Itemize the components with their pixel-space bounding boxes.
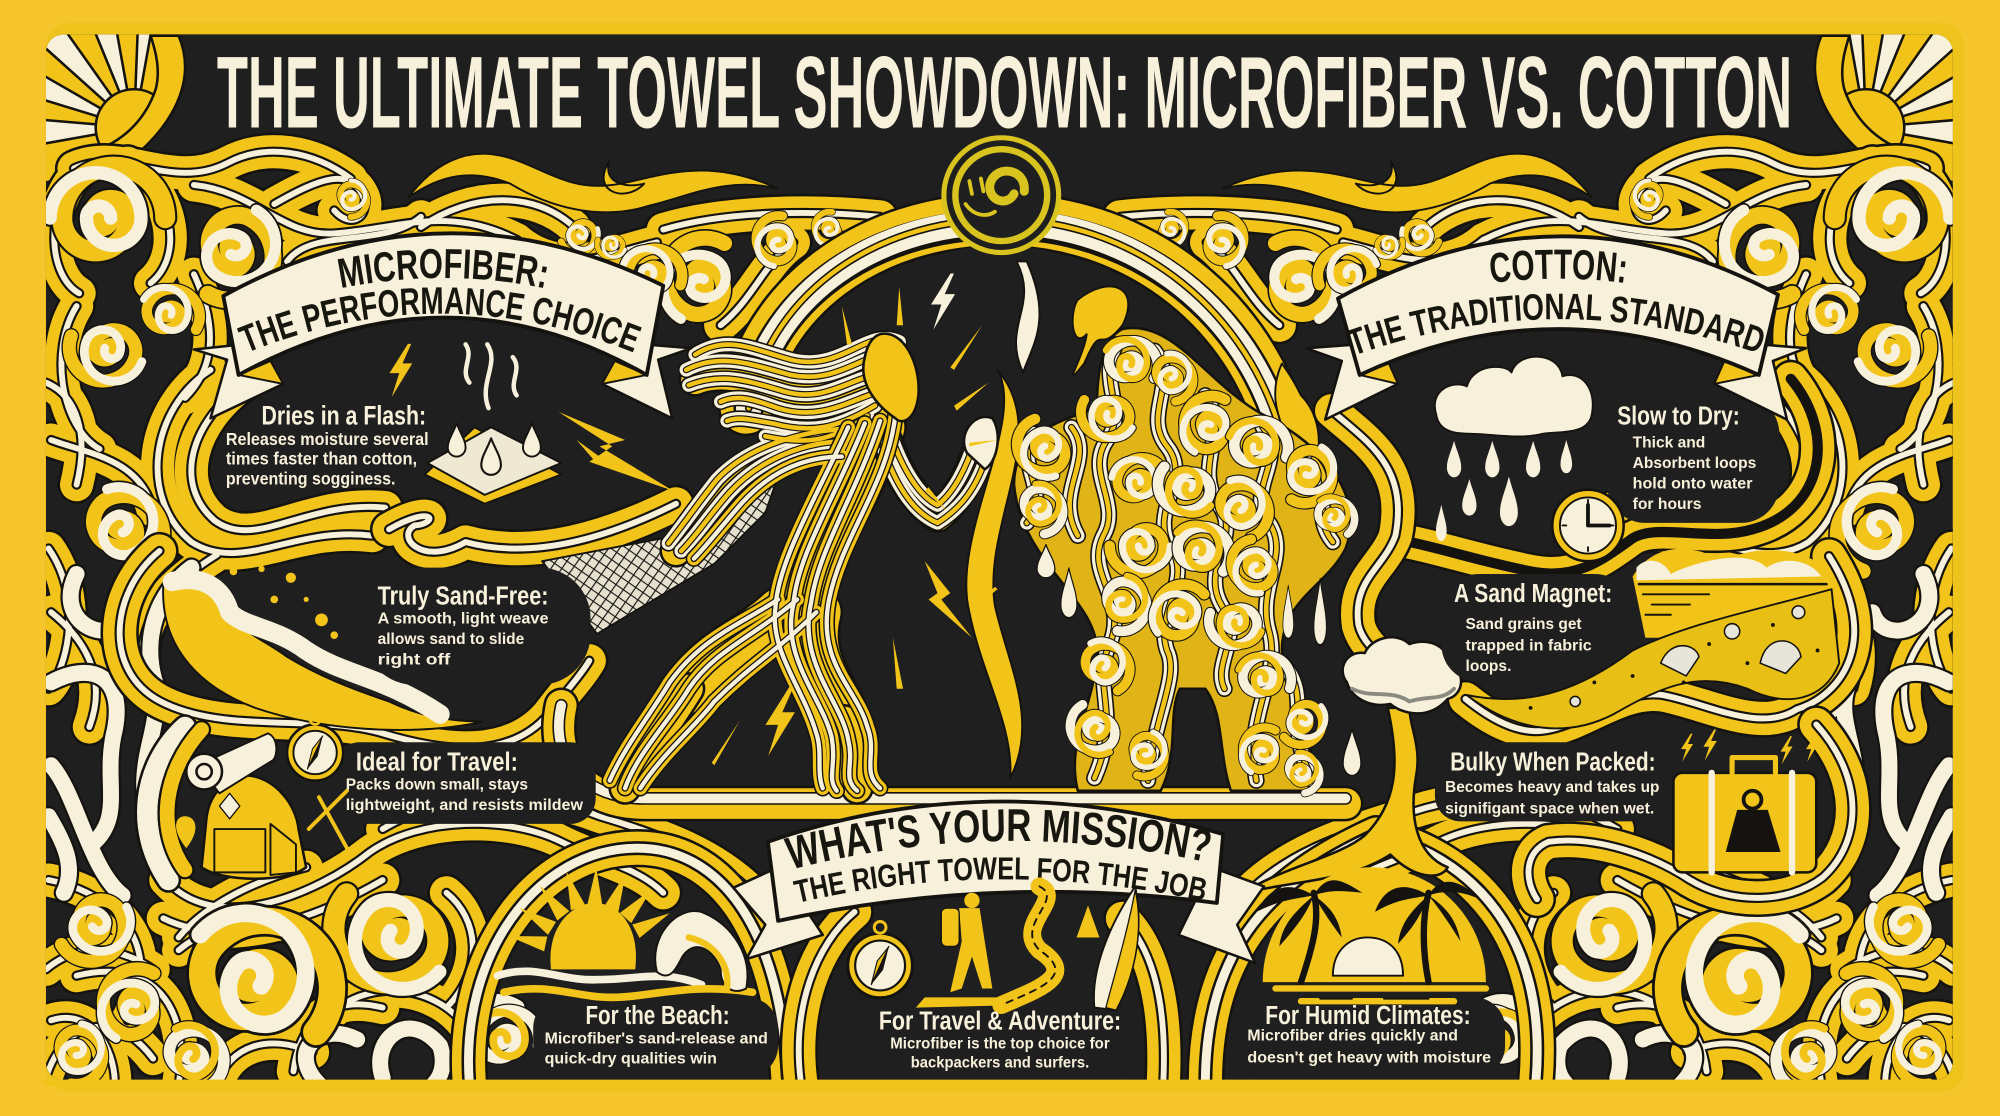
icon: backpack, roll, compass, pin xyxy=(176,714,347,879)
text block: a sand magnet: Sand grains get xyxy=(1466,616,1582,633)
banner heading: COTTON: xyxy=(1490,250,1626,283)
text block: a sand magnet xyxy=(1454,580,1612,675)
runner hair and arm strands xyxy=(668,339,987,551)
banner heading: WHAT'S YOUR MISSION? xyxy=(784,809,1211,868)
monster wavy fibres xyxy=(1027,344,1333,781)
icon: sunset with wave xyxy=(497,867,753,997)
banner: cotton xyxy=(1305,234,1808,421)
icon: suitcase with weight xyxy=(1673,730,1818,872)
icon: rain cloud xyxy=(1435,357,1593,541)
fist xyxy=(964,417,998,469)
head xyxy=(863,334,919,421)
text block: slow to dry: Thick and xyxy=(1633,435,1705,452)
text block: dries in a flash: times faster than cotton, xyxy=(226,448,417,468)
cream curls xyxy=(49,568,517,1084)
text block: truly sand-free xyxy=(378,583,549,668)
text block: bulky when packed: Bulky When Packed: xyxy=(1450,748,1656,776)
text block: truly sand-free: allows sand to slide xyxy=(378,631,524,648)
icon: pine tree xyxy=(1077,906,1099,937)
banner subheading: THE TRADITIONAL STANDARD xyxy=(1349,294,1764,354)
banner subheading: THE RIGHT TOWEL FOR THE JOB xyxy=(792,857,1206,902)
banner: mission xyxy=(732,800,1266,964)
text block: ideal for travel: Ideal for Travel: xyxy=(356,748,518,776)
icon: clock xyxy=(1552,490,1624,561)
banner tails xyxy=(194,344,691,418)
text block: for humid climates: Microfiber dries quickly and xyxy=(1247,1028,1458,1045)
text block: truly sand-free: right off xyxy=(378,651,451,668)
icon: winding road xyxy=(1001,886,1055,1005)
text block: dries in a flash xyxy=(226,401,429,489)
text block: bulky when packed: Becomes heavy and takes up xyxy=(1445,779,1660,796)
text block: for travel and adventure: Microfiber is the top choice for xyxy=(890,1035,1110,1052)
right suitcase lobe ribbons xyxy=(1528,724,1852,899)
icon: hiker xyxy=(916,893,1020,1008)
text block: slow to dry: hold onto water xyxy=(1633,475,1753,492)
icon: palm sunset xyxy=(1256,867,1486,1001)
text block: slow to dry: for hours xyxy=(1633,496,1702,513)
banner folds xyxy=(239,361,647,384)
icon: sand and foam xyxy=(163,566,482,730)
monster drips xyxy=(1037,545,1361,776)
text block: slow to dry: Slow to Dry: xyxy=(1617,403,1740,431)
runner body strands xyxy=(610,415,895,791)
text block: for humid climates: For Humid Climates: xyxy=(1265,1002,1471,1030)
text block: dries in a flash: Dries in a Flash: xyxy=(262,401,426,431)
left travel lobe inner ribbon xyxy=(147,727,202,880)
text block: bulky when packed: signifigant space when wet. xyxy=(1445,801,1654,818)
striped ribbons xyxy=(46,152,880,1084)
banner body xyxy=(1338,236,1778,375)
right rain lobe ribbons xyxy=(1332,379,1818,682)
text block: truly sand-free: A smooth, light weave xyxy=(378,611,549,628)
left border ornament xyxy=(0,0,880,1096)
text block: for travel and adventure: backpackers and surfers. xyxy=(911,1055,1089,1072)
icon: corner sun xyxy=(0,0,186,187)
text block: dries in a flash: preventing sogginess. xyxy=(226,469,395,489)
banner body xyxy=(768,802,1223,921)
emblem xyxy=(944,138,1059,253)
top wave flourish xyxy=(408,154,778,212)
icon: compass xyxy=(848,921,912,998)
icon: seascape with shells xyxy=(1467,549,1839,728)
right border ornament xyxy=(1120,0,2000,1096)
text block: for the beach: For the Beach: xyxy=(585,1002,730,1030)
text block: a sand magnet: A Sand Magnet: xyxy=(1454,580,1612,608)
center flame ribbons xyxy=(966,261,1319,778)
energy marks xyxy=(390,273,997,765)
text block: ideal for travel: Packs down small, stays xyxy=(346,776,528,793)
text block: slow to dry: Absorbent loops xyxy=(1633,455,1756,472)
icon: steam, drops and towel xyxy=(425,344,561,504)
banner: microfiber xyxy=(192,231,693,420)
towel mesh xyxy=(542,469,781,634)
text block: bulky when packed xyxy=(1445,748,1660,818)
cotton monster figure xyxy=(1010,328,1363,795)
shells xyxy=(1570,606,1805,707)
beach arch xyxy=(469,848,788,1084)
text block: for humid climates xyxy=(1247,1002,1491,1066)
banner subheading: THE PERFORMANCE CHOICE xyxy=(237,287,642,352)
banner tails xyxy=(1306,344,1806,420)
text block: for travel and adventure xyxy=(879,1007,1121,1072)
bottom inner frame line xyxy=(46,1080,1953,1085)
microfiber runner figure xyxy=(542,334,998,791)
text block: a sand magnet: loops. xyxy=(1466,658,1511,675)
corner ribbon xyxy=(64,36,185,179)
icon: surfboard xyxy=(1094,886,1139,1010)
text block: truly sand-free: Truly Sand-Free: xyxy=(378,583,548,611)
banner heading: MICROFIBER: xyxy=(338,248,547,288)
right sand lobe ribbons xyxy=(1466,556,1854,731)
sand-free lobe ribbons xyxy=(120,504,676,748)
banner body xyxy=(223,233,663,375)
banner tails xyxy=(733,867,1264,963)
text block: a sand magnet: trapped in fabric xyxy=(1466,637,1592,654)
text block: ideal for travel xyxy=(346,748,584,814)
volcano ribbon with cloud xyxy=(1244,637,1461,893)
text block: dries in a flash: Releases moisture several xyxy=(226,429,429,449)
spiral cluster xyxy=(50,167,842,1096)
sand speckle xyxy=(1529,623,1819,710)
humid arch xyxy=(1205,834,1537,1084)
text block: for humid climates: doesn't get heavy with moisture xyxy=(1247,1049,1491,1066)
text block: for the beach xyxy=(545,1002,768,1068)
banner folds xyxy=(1360,361,1759,384)
towel base band xyxy=(559,705,1346,804)
text block: ideal for travel: lightweight, and resists mildew xyxy=(346,797,584,814)
text block: for the beach: quick-dry qualities win xyxy=(545,1051,717,1068)
travel arch ribbons xyxy=(799,912,1164,1084)
text block: slow to dry xyxy=(1617,403,1756,513)
text block: for the beach: Microfiber's sand-release and xyxy=(545,1030,768,1047)
runner body xyxy=(625,370,980,788)
central arch xyxy=(746,219,1282,440)
dark text backings xyxy=(334,395,1779,1076)
text block: for travel and adventure: For Travel & Adventure: xyxy=(879,1007,1121,1035)
